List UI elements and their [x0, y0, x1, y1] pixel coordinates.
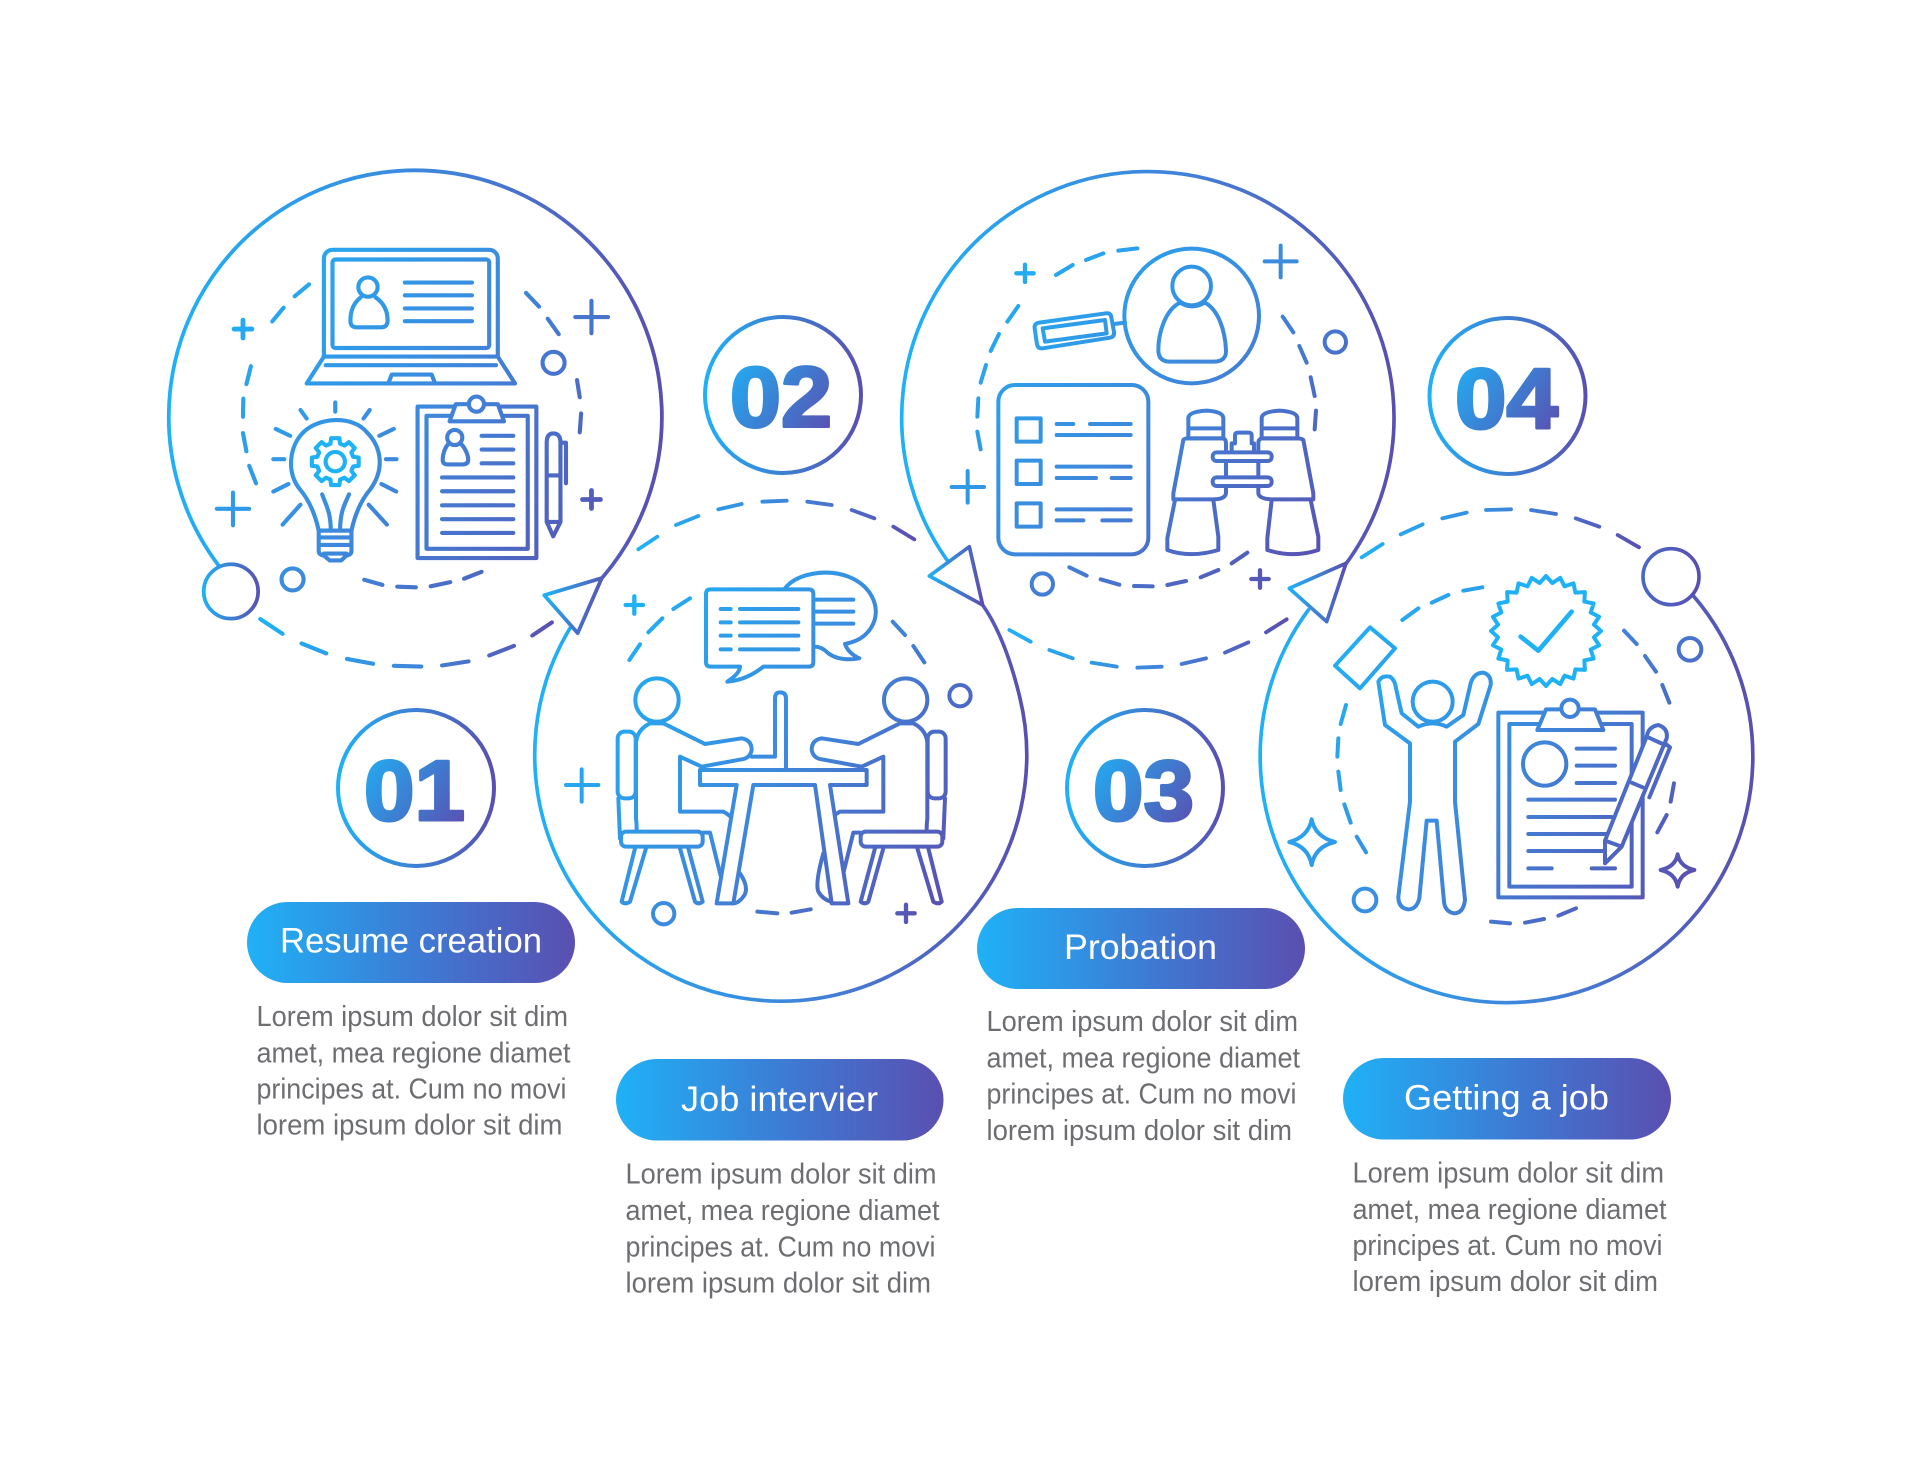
heading pill: Resume creation [247, 902, 575, 983]
badge: 02: 02 [730, 350, 832, 446]
heading pill: Probation: Probation [1064, 928, 1217, 967]
icon: person raising arms with paper [1335, 627, 1491, 913]
arrow: step 2 to step 3 [929, 547, 983, 605]
ring: step 4 circle arc and dashed top [1260, 509, 1753, 1003]
badge: 01 [338, 710, 494, 866]
text block: step 2 [626, 1158, 940, 1300]
badge: 04: 04 [1455, 352, 1558, 447]
badge: 02 [705, 317, 861, 473]
text block: step 4: lorem ipsum dolor sit dim [1352, 1266, 1658, 1298]
text block: step 3: lorem ipsum dolor sit dim [986, 1115, 1292, 1147]
text block: step 1: principes at. Cum no movi [256, 1074, 566, 1106]
ring: step 3 circle arc and dashed bottom [902, 172, 1394, 668]
marker: start circle of step 1 [204, 564, 258, 619]
icon: front speech bubble [706, 589, 813, 682]
icon: laptop with profile [307, 250, 515, 383]
decorations: pluses and small circles [217, 301, 608, 590]
icon: checklist [998, 385, 1148, 554]
inner dashed ring [977, 248, 1316, 586]
text block: step 3: Lorem ipsum dolor sit dim [986, 1006, 1298, 1038]
text block: step 2: lorem ipsum dolor sit dim [626, 1268, 931, 1300]
icon group: resume creation (laptop, bulb, clipboard, pen) [217, 250, 608, 590]
icon group: job interview (two people at a table) [566, 573, 971, 924]
badge: 03 [1067, 710, 1223, 866]
icon: check badge [1491, 576, 1601, 686]
heading pill: Resume creation: Resume creation [280, 922, 542, 960]
arrow: step 1 to step 2 [544, 578, 602, 633]
decorations: sparkles and small circles [1289, 638, 1701, 911]
heading pill: Job intervier: Job intervier [681, 1080, 878, 1119]
icon: pen [547, 433, 566, 536]
text block: step 4: principes at. Cum no movi [1352, 1230, 1662, 1262]
inner dashed ring [629, 598, 924, 913]
arrow: step 3 to step 4 [1289, 563, 1346, 622]
icon: contract clipboard [1498, 700, 1643, 897]
text block: step 1: Lorem ipsum dolor sit dim [256, 1001, 568, 1033]
icon: right person on chair [812, 678, 946, 903]
icon: back speech bubble [785, 573, 876, 659]
text block: step 4: Lorem ipsum dolor sit dim [1352, 1158, 1664, 1190]
text block: step 4 [1352, 1158, 1666, 1298]
heading pill: Probation [977, 908, 1305, 989]
inner dashed ring [243, 284, 581, 587]
text block: step 3: principes at. Cum no movi [986, 1078, 1296, 1110]
decorations: pluses and small circles [566, 596, 971, 924]
ring: step 1 circle arc and dashed return [169, 170, 662, 667]
icon: left person on chair [618, 678, 752, 903]
icon group: getting a job (person, badge, contract, pen) [1289, 576, 1701, 923]
ring: step 2 circle arc and dashed top [535, 501, 1027, 1001]
text block: step 2: principes at. Cum no movi [626, 1232, 936, 1264]
text block: step 4: amet, mea regione diamet [1352, 1194, 1666, 1226]
text block: step 1: amet, mea regione diamet [256, 1038, 570, 1070]
text block: step 1 [256, 1001, 570, 1142]
badge: 01: 01 [364, 744, 465, 839]
decorations: pluses and small circles [952, 246, 1346, 595]
icon: resume clipboard [418, 397, 536, 558]
heading pill: Getting a job: Getting a job [1404, 1078, 1609, 1118]
icon: magnifier with person [1035, 249, 1259, 383]
icon: signing pen [1605, 725, 1670, 863]
text block: step 3 [986, 1006, 1300, 1147]
text block: step 2: amet, mea regione diamet [626, 1195, 940, 1227]
badge: 04 [1430, 318, 1586, 474]
icon group: probation (magnifier, checklist, binoculars) [952, 246, 1346, 595]
text block: step 2: Lorem ipsum dolor sit dim [626, 1158, 936, 1190]
icon: table with laptop [700, 692, 867, 903]
badge: 03: 03 [1093, 744, 1194, 839]
text block: step 3: amet, mea regione diamet [986, 1042, 1300, 1074]
icon: light bulb with gear [273, 402, 397, 560]
inner dashed ring [1337, 587, 1674, 923]
text block: step 1: lorem ipsum dolor sit dim [256, 1110, 562, 1142]
heading pill: Getting a job [1343, 1058, 1671, 1140]
icon: binoculars [1167, 411, 1318, 554]
heading pill: Job intervier [616, 1059, 944, 1140]
marker: end circle of step 4 [1643, 549, 1699, 605]
